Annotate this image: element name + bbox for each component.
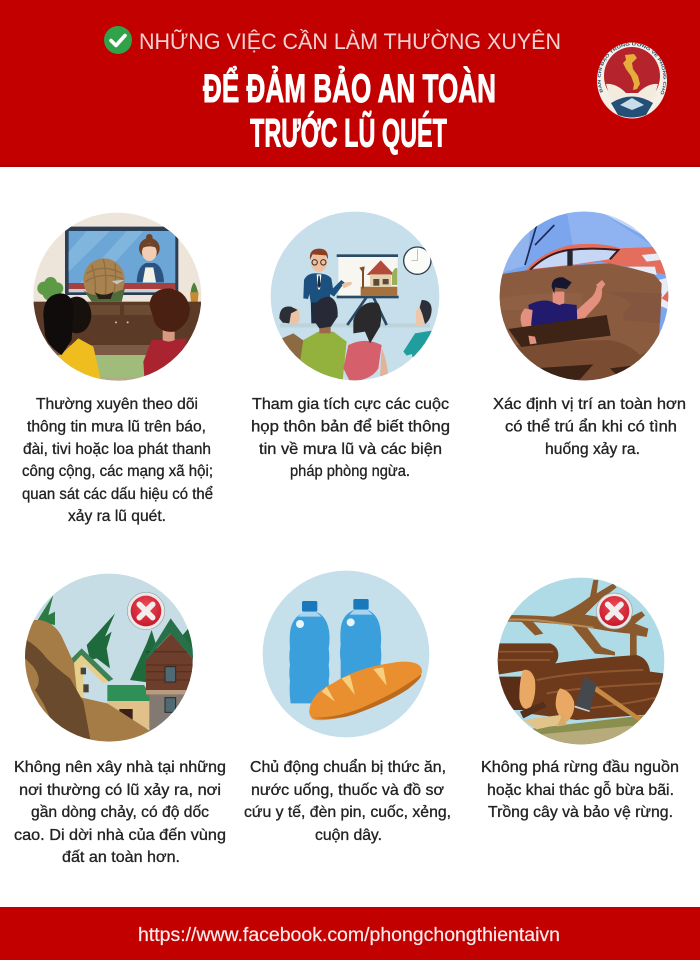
- text block: attend meetings: [251, 396, 450, 480]
- text block: prepare supplies: nước uống, thuốc và đồ sơ: [251, 782, 445, 799]
- illustration: family watching TV: [30, 210, 207, 387]
- illustration: man in flood mud: [500, 212, 668, 380]
- illustration: meeting presentation: [268, 210, 445, 387]
- text block: follow the news: thông tin mưa lũ trên báo,: [27, 418, 206, 436]
- text block: attend meetings: Tham gia tích cực các cuộc: [252, 396, 449, 413]
- text block: safe location: Xác định vị trí an toàn hơn: [493, 396, 686, 413]
- illustration: houses near slope: [23, 572, 197, 747]
- illustration: water bottles and bread: [260, 568, 433, 742]
- text block: protect forests: Không phá rừng đầu nguồn: [481, 759, 679, 776]
- text block: follow the news: Thường xuyên theo dõi: [36, 396, 198, 413]
- text block: do not build near flood zones: gần dòng chảy, có độ dốc: [31, 804, 209, 821]
- illustration: cut logs and axe: [495, 575, 668, 748]
- text block: prepare supplies: Chủ động chuẩn bị thức ăn,: [250, 758, 446, 776]
- subtitle: NHỮNG VIỆC CẦN LÀM THƯỜNG XUYÊN: [139, 29, 561, 54]
- text block: safe location: có thể trú ẩn khi có tình: [505, 418, 677, 436]
- header band: [0, 0, 700, 167]
- text block: follow the news: xảy ra lũ quét.: [68, 508, 166, 525]
- text block: follow the news: đài, tivi hoặc loa phát thanh: [23, 441, 211, 458]
- text block: protect forests: hoặc khai thác gỗ bừa bãi.: [487, 780, 674, 799]
- text block: do not build near flood zones: cao. Di dời nhà của đến vùng: [14, 827, 226, 844]
- icon: green check: [104, 26, 132, 54]
- footer link: https://www.facebook.com/phongchongthientaivn: [138, 925, 560, 946]
- title: TRƯỚC LŨ QUÉT: [250, 110, 447, 156]
- text block: protect forests: Trồng cây và bảo vệ rừng.: [488, 804, 673, 821]
- text block: attend meetings: họp thôn bản để biết thông: [251, 418, 450, 436]
- title: ĐỂ ĐẢM BẢO AN TOÀN: [203, 64, 496, 111]
- text block: follow the news: công cộng, các mạng xã hội;: [22, 463, 213, 480]
- text block: do not build near flood zones: nơi thường có lũ xảy ra, nơi: [19, 782, 221, 799]
- text block: do not build near flood zones: Không nên xây nhà tại những: [14, 759, 226, 776]
- text block: prepare supplies: [244, 758, 451, 844]
- text block: follow the news: quan sát các dấu hiệu có thể: [22, 485, 213, 503]
- text block: attend meetings: tin về mưa lũ và các biện: [259, 441, 442, 458]
- logo emblem: [597, 42, 667, 118]
- text block: prepare supplies: cứu y tế, đèn pin, cuốc, xẻng,: [244, 804, 451, 821]
- text block: protect forests: [481, 759, 679, 821]
- text block: follow the news: [22, 396, 213, 525]
- title: [203, 64, 496, 156]
- text block: safe location: [493, 396, 686, 458]
- text block: prepare supplies: cuộn dây.: [315, 827, 382, 844]
- text block: do not build near flood zones: đất an toàn hơn.: [62, 849, 180, 866]
- text block: attend meetings: pháp phòng ngừa.: [290, 463, 410, 480]
- text block: do not build near flood zones: [14, 759, 226, 866]
- footer band: [0, 907, 700, 960]
- text block: safe location: huống xảy ra.: [545, 441, 640, 458]
